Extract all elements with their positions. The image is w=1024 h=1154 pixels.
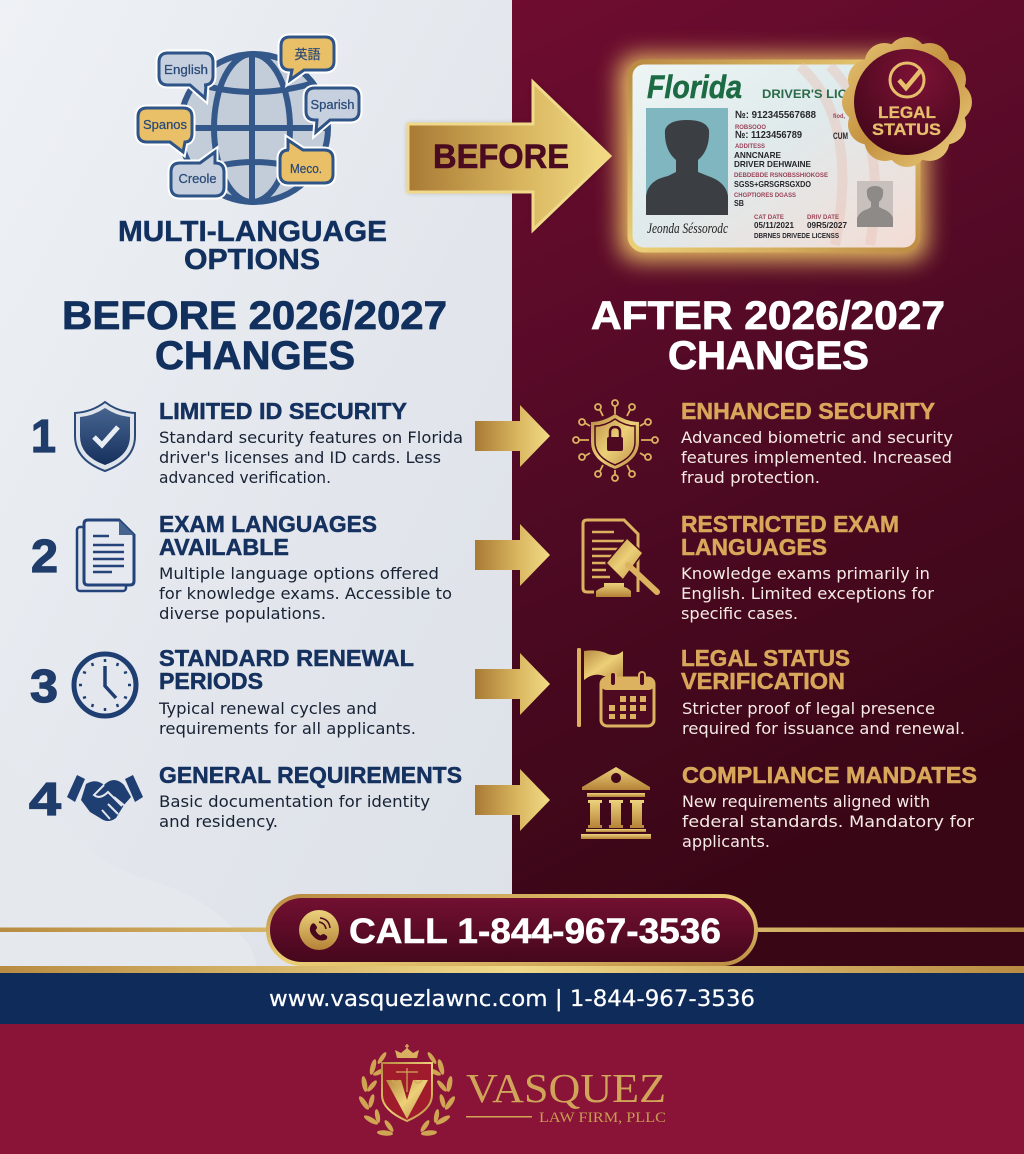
panel: after background <box>512 0 1024 966</box>
arrow: row 2 <box>475 524 550 586</box>
icon: flag and calendar <box>577 648 654 727</box>
icon: phone <box>299 910 339 950</box>
bubble: Chinese: 英語 <box>294 44 321 63</box>
badge: legal status seal <box>842 37 972 167</box>
title <box>159 645 414 694</box>
card data fields: CHGPTIORES DGASS <box>734 192 797 199</box>
card signature: Jeonda Séssorodc <box>647 221 728 237</box>
number 1: 1 <box>31 410 56 462</box>
card data fields: CAT DATE <box>754 214 785 221</box>
title: STANDARD RENEWAL <box>159 645 414 671</box>
logo wordmark: VASQUEZ <box>466 1065 666 1111</box>
title: PERIODS <box>159 668 263 694</box>
card data fields: CUM <box>833 131 848 141</box>
card data fields <box>734 109 848 240</box>
bubble: Chinese <box>281 37 334 80</box>
icon: handshake <box>67 775 143 821</box>
title: VERIFICATION <box>681 668 845 694</box>
description: required for issuance and renewal. <box>682 719 965 738</box>
heading: after changes <box>591 294 945 378</box>
row 3 after <box>577 645 965 738</box>
footer: contact band: www.vasquezlawnc.com | 1-844-967-3536 <box>269 987 755 1012</box>
description: applicants. <box>682 832 770 851</box>
description <box>159 428 463 487</box>
heading: after changes: CHANGES <box>668 334 869 378</box>
call button <box>268 896 756 964</box>
title: ENHANCED SECURITY <box>681 398 935 424</box>
card data fields: ROBSOOO <box>735 124 766 131</box>
title: LANGUAGES <box>681 534 827 560</box>
row 3 before <box>30 645 416 738</box>
row 4 after <box>581 762 977 851</box>
card data fields: SB <box>734 198 744 208</box>
card data fields: DRIV DATE <box>807 214 840 221</box>
arrow: before <box>408 82 610 230</box>
bubble: English <box>159 53 213 98</box>
seal text: LEGAL <box>878 103 936 122</box>
description: fraud protection. <box>681 468 820 487</box>
arrow: row 3 <box>475 653 550 715</box>
card ghost photo <box>857 181 893 227</box>
title: RESTRICTED EXAM <box>681 511 899 537</box>
description: and residency. <box>159 812 278 831</box>
card title: Florida <box>647 69 742 105</box>
title: EXAM LANGUAGES <box>159 511 377 537</box>
card data fields: №: 912345567688 <box>735 109 816 121</box>
description: Advanced biometric and security <box>681 428 953 447</box>
card data fields: DRIVER DEHWAINE <box>734 159 811 169</box>
title <box>681 645 850 694</box>
logo: Vasquez Law Firm <box>357 1044 666 1136</box>
title: LEGAL STATUS <box>681 645 850 671</box>
heading: after changes: AFTER 2026/2027 <box>591 294 945 338</box>
seal text: STATUS <box>872 120 941 139</box>
arrow: row 1 <box>475 405 550 467</box>
description: Multiple language options offered <box>159 564 439 583</box>
description: specific cases. <box>681 604 798 623</box>
heading: before changes <box>62 294 447 378</box>
description <box>159 564 452 623</box>
bubble: Creole <box>171 152 224 196</box>
description: New requirements aligned with <box>682 792 930 811</box>
title: LIMITED ID SECURITY <box>159 398 407 424</box>
seal text <box>872 103 941 139</box>
description: requirements for all applicants. <box>159 719 416 738</box>
description: Basic documentation for identity <box>159 792 430 811</box>
card data fields: SGSS+GRSGRSGXDO <box>734 179 811 189</box>
bubble: Meco <box>280 140 333 183</box>
gold divider <box>0 966 1024 973</box>
heading: before changes: BEFORE 2026/2027 <box>62 294 447 338</box>
number 2: 2 <box>31 530 58 582</box>
row 2 before <box>31 511 452 623</box>
description: features implemented. Increased <box>681 448 952 467</box>
description: diverse populations. <box>159 604 326 623</box>
bubble: Spanos: Spanos <box>143 117 187 132</box>
description: federal standards. Mandatory for <box>682 812 974 831</box>
icon: courthouse <box>581 767 651 839</box>
card data fields: ANNCNARE <box>734 150 781 160</box>
bubble: Meco: Meco. <box>290 161 322 176</box>
icon: documents <box>77 520 134 591</box>
card data fields: DEBDEBDE RSNOBSSHIOKOSE <box>734 172 829 179</box>
title: AVAILABLE <box>159 534 289 560</box>
bubble: Sparish: Sparish <box>310 97 354 112</box>
description <box>681 428 953 487</box>
bubble: Spanos <box>138 108 192 152</box>
icon: globe with language speech bubbles <box>138 37 359 202</box>
row 2 after <box>583 511 934 623</box>
title <box>681 511 899 560</box>
card data fields: ADDITESS <box>735 143 766 150</box>
description <box>682 792 974 851</box>
card title: DRIVER'S LIC <box>762 87 847 101</box>
description <box>681 564 934 623</box>
license card <box>630 62 918 250</box>
icon: document and gavel <box>583 520 657 597</box>
heading: multi-language options: MULTI-LANGUAGE <box>118 216 387 248</box>
logo crown <box>395 1044 419 1058</box>
logo shield <box>382 1063 432 1121</box>
description: Standard security features on Florida <box>159 428 463 447</box>
card data fields: 09R5/2027 <box>807 220 847 230</box>
number 3: 3 <box>30 660 58 712</box>
row 1 after <box>573 398 953 487</box>
description <box>158 699 416 738</box>
card photo <box>646 108 728 215</box>
description: Stricter proof of legal presence <box>682 699 935 718</box>
icon: shield check <box>75 402 135 471</box>
bubble: Sparish <box>306 88 359 132</box>
bubble: English: English <box>164 62 208 77</box>
icon: clock <box>74 654 136 716</box>
seal check icon <box>890 63 924 97</box>
logo wordmark: LAW FIRM, PLLC <box>539 1110 666 1126</box>
description: advanced verification. <box>159 468 331 487</box>
row 4 before <box>29 762 462 831</box>
description: for knowledge exams. Accessible to <box>159 584 452 603</box>
title: COMPLIANCE MANDATES <box>682 762 977 788</box>
heading: before changes: CHANGES <box>155 334 355 378</box>
arrow: row 4 <box>475 769 550 831</box>
row 1 before <box>31 398 463 487</box>
description <box>159 792 430 831</box>
description <box>682 699 965 738</box>
phone number: CALL 1-844-967-3536 <box>349 912 721 951</box>
number 4: 4 <box>29 773 62 825</box>
card data fields: DBRNES DRIVEDE LICENSS <box>754 233 839 240</box>
description: driver's licenses and ID cards. Less <box>159 448 441 467</box>
panel: before background <box>0 0 512 966</box>
card data fields: fiod, <box>833 113 845 120</box>
bubble: Creole: Creole <box>178 171 216 186</box>
description: Typical renewal cycles and <box>158 699 377 718</box>
card data fields: №: 1123456789 <box>735 129 802 141</box>
arrow: before: BEFORE <box>433 138 569 176</box>
glow behind license <box>620 56 926 260</box>
card data fields: 05/11/2021 <box>754 220 794 230</box>
footer: contact band <box>0 973 1024 1024</box>
description: Knowledge exams primarily in <box>681 564 930 583</box>
title <box>159 511 377 560</box>
footer: crimson band <box>0 1024 1024 1154</box>
card title <box>647 69 847 105</box>
icon: security shield with circuits <box>573 400 658 481</box>
heading: multi-language options: OPTIONS <box>184 244 320 276</box>
heading: multi-language options <box>118 216 387 276</box>
logo laurels <box>357 1051 457 1136</box>
description: English. Limited exceptions for <box>681 584 934 603</box>
title: GENERAL REQUIREMENTS <box>159 762 462 788</box>
